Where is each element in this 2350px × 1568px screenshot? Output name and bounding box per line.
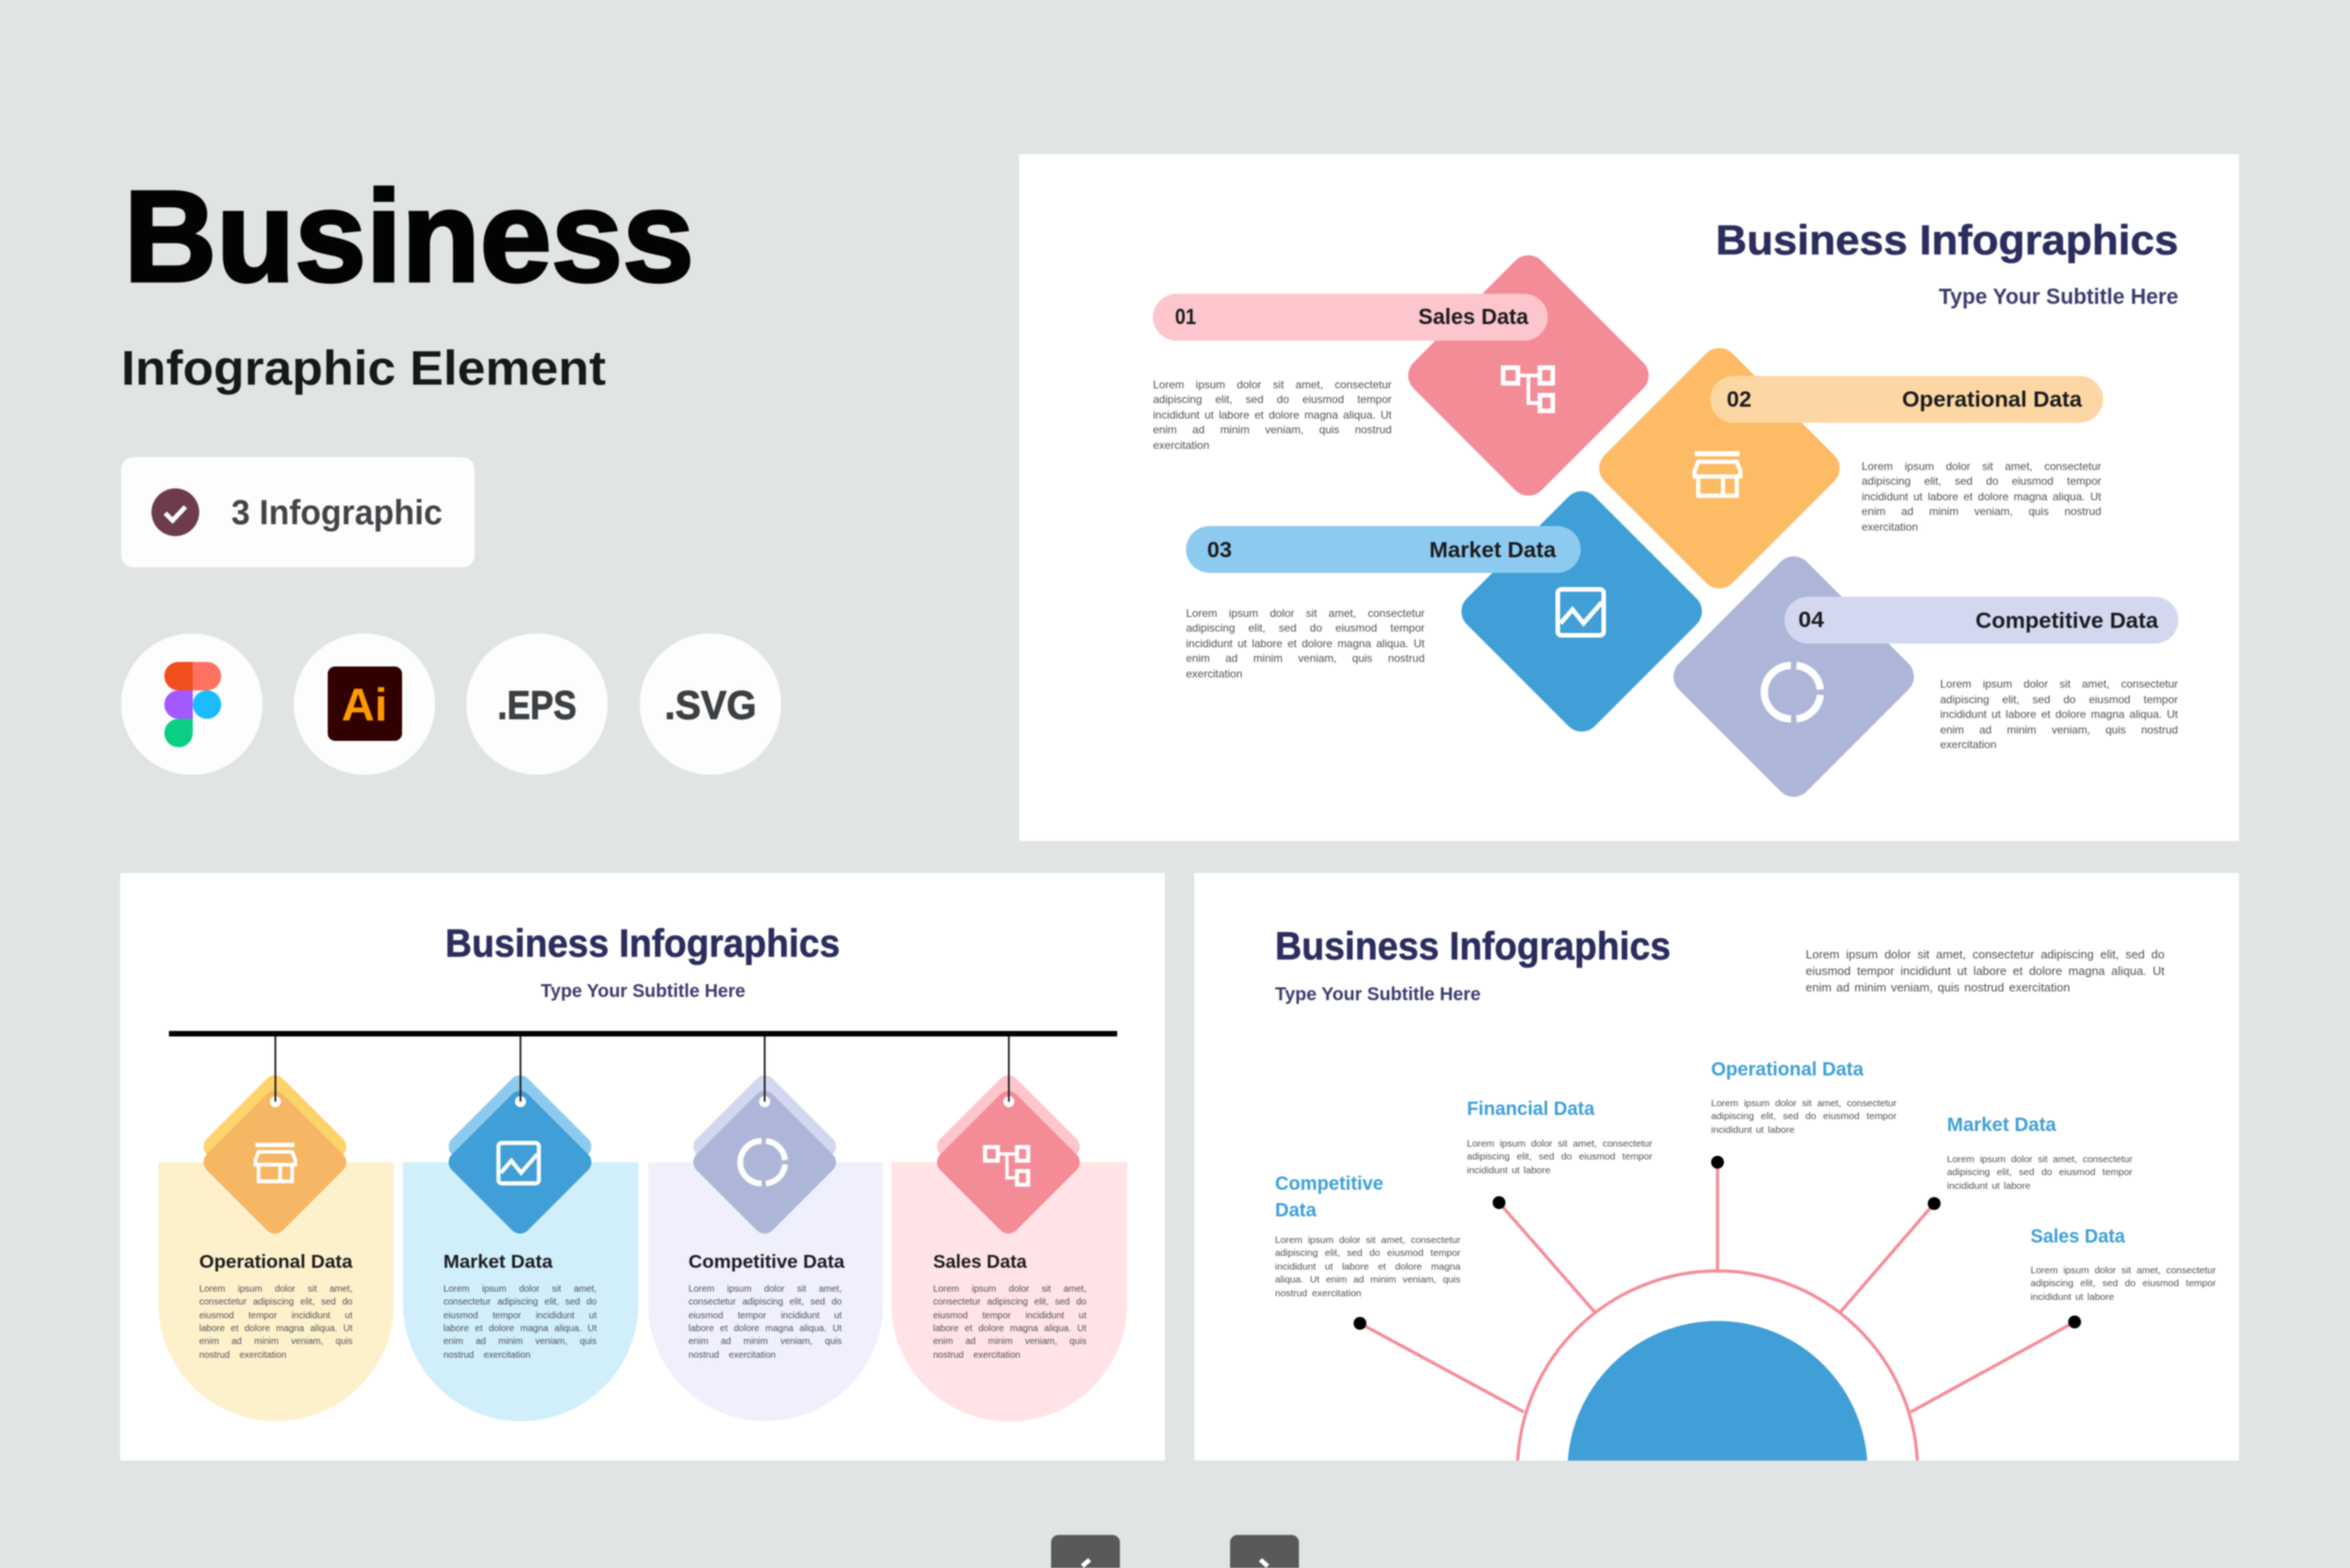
pill: 03 market data: 03	[1207, 538, 1232, 563]
label: market data	[1947, 1114, 2132, 1195]
pill: 01 sales data	[1153, 294, 1548, 341]
badge: 3 Infographic	[121, 457, 475, 567]
card: market data: nostrud exercitation	[443, 1350, 531, 1361]
card: competitive data: enim ad minim veniam, quis	[688, 1337, 842, 1347]
arrow: next button	[1230, 1535, 1299, 1568]
card: market data: Market Data	[443, 1252, 554, 1272]
label: competitive data: Lorem ipsum dolor sit amet, consectetur	[1275, 1235, 1460, 1246]
badge background	[121, 457, 475, 567]
pill: 04 competitive data: Competitive Data	[1975, 609, 2159, 633]
label: financial data: Lorem ipsum dolor sit amet, consectetur	[1467, 1138, 1652, 1149]
label: sales data: adipiscing elit, sed do eiusmod tempor	[2031, 1278, 2216, 1289]
label: competitive data: incididunt ut labore et dolore magna	[1275, 1261, 1460, 1272]
spoke: financial data	[1493, 1196, 1595, 1312]
icon: Figma	[121, 633, 263, 775]
card: operational data: nostrud exercitation	[199, 1350, 286, 1361]
label: operational data: Lorem ipsum dolor sit amet, consectetur	[1711, 1098, 1897, 1109]
label: competitive data: Data	[1275, 1200, 1316, 1221]
pill: 02 operational data: Operational Data	[1902, 387, 2083, 412]
card: sales data: consectetur adipiscing elit, sed do	[933, 1297, 1087, 1307]
card: competitive data: consectetur adipiscing elit, sed do	[688, 1297, 842, 1307]
card: operational data: labore et dolore magna aliqua. Ut	[199, 1324, 352, 1334]
text block: competitive data: incididunt ut labore et dolore magna aliqua. Ut	[1941, 708, 2177, 721]
spoke: sales data	[1911, 1316, 2081, 1412]
card: operational data: Operational Data	[199, 1252, 353, 1272]
card: operational data: consectetur adipiscing elit, sed do	[199, 1297, 352, 1307]
panel subtitle: Type Your Subtitle Here	[1939, 285, 2178, 309]
text block: sales data: incididunt ut labore et dolore magna aliqua. Ut	[1153, 409, 1392, 421]
label: operational data	[1711, 1059, 1897, 1139]
title: Business	[124, 163, 694, 308]
card: competitive data: Competitive Data	[688, 1252, 845, 1272]
card: market data: enim ad minim veniam, quis	[443, 1337, 597, 1347]
label: market data: adipiscing elit, sed do eiusmod tempor	[1947, 1167, 2132, 1178]
card: sales data: Lorem ipsum dolor sit amet,	[933, 1284, 1087, 1294]
label: operational data: incididunt ut labore	[1711, 1125, 1795, 1136]
text block: market data: enim ad minim veniam, quis nostrud	[1186, 652, 1425, 665]
semicircle diagram	[1517, 1271, 1918, 1461]
icon: EPS format	[466, 633, 608, 775]
card: competitive data: nostrud exercitation	[688, 1350, 776, 1361]
card: competitive data: eiusmod tempor incididunt ut	[688, 1311, 842, 1321]
panel: hanging tags infographic	[120, 873, 1165, 1461]
label: competitive data: nostrud exercitation	[1275, 1288, 1361, 1299]
pill: 04 competitive data	[1785, 597, 2178, 644]
label: sales data: incididunt ut labore	[2031, 1292, 2114, 1303]
text block: market data	[1186, 606, 1425, 689]
spoke: operational data	[1711, 1156, 1724, 1271]
pill: 03 market data: Market Data	[1429, 538, 1557, 563]
label: competitive data: aliqua. Ut enim ad minim veniam, quis	[1275, 1274, 1460, 1285]
card: competitive data: labore et dolore magna aliqua. Ut	[688, 1324, 842, 1334]
text block: operational data: incididunt ut labore et dolore magna aliqua. Ut	[1862, 490, 2101, 503]
card: sales data: eiusmod tempor incididunt ut	[933, 1311, 1087, 1321]
label: sales data: Lorem ipsum dolor sit amet, consectetur	[2031, 1265, 2216, 1276]
label: competitive data	[1275, 1173, 1460, 1304]
text block: competitive data	[1941, 677, 2177, 759]
diamond: operational data	[1592, 341, 1847, 596]
label: sales data: Sales Data	[2031, 1226, 2125, 1247]
card: sales data	[891, 1036, 1127, 1421]
badge label: 3 Infographic	[231, 494, 442, 532]
text block: sales data: Lorem ipsum dolor sit amet, consectetur	[1153, 378, 1392, 391]
panel heading: Business Infographics	[445, 922, 840, 966]
label: operational data: Operational Data	[1711, 1059, 1863, 1080]
card: market data: Lorem ipsum dolor sit amet,	[443, 1284, 597, 1294]
text block: competitive data: Lorem ipsum dolor sit amet, consectetur	[1941, 678, 2177, 690]
label: financial data	[1467, 1098, 1652, 1180]
arrow: previous button	[1051, 1535, 1120, 1568]
icon: check mark	[151, 488, 199, 536]
subtitle: Infographic Element	[121, 342, 606, 396]
panel: radial infographic	[1194, 873, 2239, 1461]
label: market data: Lorem ipsum dolor sit amet, consectetur	[1947, 1154, 2132, 1165]
card: sales data: Sales Data	[933, 1252, 1027, 1272]
diamond: sales data	[1401, 248, 1656, 503]
icon: Adobe Illustrator: Ai	[341, 679, 387, 731]
card: operational data: enim ad minim veniam, quis	[199, 1337, 352, 1347]
icon: SVG format: .SVG	[665, 683, 756, 728]
panel background	[1019, 154, 2239, 841]
card: market data: labore et dolore magna aliqua. Ut	[443, 1324, 597, 1334]
card: competitive data	[648, 1036, 883, 1421]
text block: competitive data: exercitation	[1941, 738, 1997, 751]
diamond: competitive data	[1666, 549, 1921, 804]
label: operational data: adipiscing elit, sed do eiusmod tempor	[1711, 1111, 1897, 1122]
label: financial data: incididunt ut labore	[1467, 1165, 1550, 1176]
label: market data: Market Data	[1947, 1114, 2056, 1136]
panel intro text: enim ad minim veniam, quis nostrud exercitation	[1806, 980, 2070, 994]
card: market data: consectetur adipiscing elit, sed do	[443, 1297, 597, 1307]
label: financial data: Financial Data	[1467, 1098, 1595, 1120]
label: financial data: adipiscing elit, sed do eiusmod tempor	[1467, 1151, 1652, 1162]
card: operational data: eiusmod tempor incididunt ut	[199, 1311, 352, 1321]
panel background	[1194, 873, 2239, 1461]
text block: competitive data: adipiscing elit, sed do eiusmod tempor	[1941, 693, 2177, 706]
label: market data: incididunt ut labore	[1947, 1181, 2031, 1192]
text block: market data: Lorem ipsum dolor sit amet, consectetur	[1186, 606, 1425, 619]
card: sales data: nostrud exercitation	[933, 1350, 1021, 1361]
panel intro text	[1806, 946, 2165, 1002]
pill: 02 operational data: 02	[1727, 387, 1751, 412]
text block: operational data: enim ad minim veniam, quis nostrud	[1862, 505, 2101, 518]
text block: sales data: adipiscing elit, sed do eiusmod tempor	[1153, 393, 1392, 406]
label: sales data	[2031, 1226, 2216, 1306]
label: competitive data: Competitive	[1275, 1173, 1383, 1194]
card: operational data	[158, 1036, 394, 1421]
diamond: market data	[1454, 484, 1709, 739]
text block: operational data: Lorem ipsum dolor sit amet, consectetur	[1862, 459, 2101, 472]
icon: SVG format	[640, 633, 781, 775]
hanging bar	[169, 1031, 1117, 1036]
pill: 04 competitive data: 04	[1798, 608, 1825, 633]
card: sales data: enim ad minim veniam, quis	[933, 1337, 1087, 1347]
panel heading: Business Infographics	[1716, 217, 2178, 263]
panel intro text: eiusmod tempor incididunt ut labore et dolore magna aliqua. Ut	[1806, 964, 2165, 978]
card: market data	[403, 1036, 639, 1421]
text block: market data: exercitation	[1186, 667, 1242, 680]
panel subtitle: Type Your Subtitle Here	[1275, 984, 1481, 1004]
pill: 02 operational data	[1710, 376, 2103, 422]
pill: 01 sales data: 01	[1175, 305, 1196, 330]
text block: sales data: exercitation	[1153, 439, 1209, 452]
text block: operational data	[1862, 459, 2101, 542]
panel: diamonds infographic	[1019, 154, 2239, 841]
panel intro text: Lorem ipsum dolor sit amet, consectetur adipiscing elit, sed do	[1806, 947, 2165, 961]
text block: sales data	[1153, 376, 1392, 459]
panel subtitle: Type Your Subtitle Here	[541, 981, 745, 1002]
text block: market data: incididunt ut labore et dolore magna aliqua. Ut	[1186, 637, 1425, 650]
icon: EPS format: .EPS	[498, 683, 576, 728]
card: market data: eiusmod tempor incididunt ut	[443, 1311, 597, 1321]
spoke: market data	[1841, 1197, 1941, 1312]
card: operational data: Lorem ipsum dolor sit amet,	[199, 1284, 352, 1294]
pill: 01 sales data: Sales Data	[1418, 305, 1529, 330]
panel background	[120, 873, 1165, 1461]
panel heading: Business Infographics	[1275, 924, 1671, 969]
text block: market data: adipiscing elit, sed do eiusmod tempor	[1186, 622, 1425, 634]
text block: competitive data: enim ad minim veniam, quis nostrud	[1941, 723, 2177, 736]
text block: sales data: enim ad minim veniam, quis nostrud	[1153, 423, 1392, 436]
icon: Adobe Illustrator	[294, 633, 435, 775]
text block: operational data: exercitation	[1862, 521, 1918, 533]
card: sales data: labore et dolore magna aliqua. Ut	[933, 1324, 1087, 1334]
label: competitive data: adipiscing elit, sed do eiusmod tempor	[1275, 1248, 1460, 1259]
card: competitive data: Lorem ipsum dolor sit amet,	[688, 1284, 842, 1294]
text block: operational data: adipiscing elit, sed do eiusmod tempor	[1862, 475, 2101, 487]
pill: 03 market data	[1186, 526, 1581, 573]
spoke: competitive data	[1353, 1316, 1524, 1412]
